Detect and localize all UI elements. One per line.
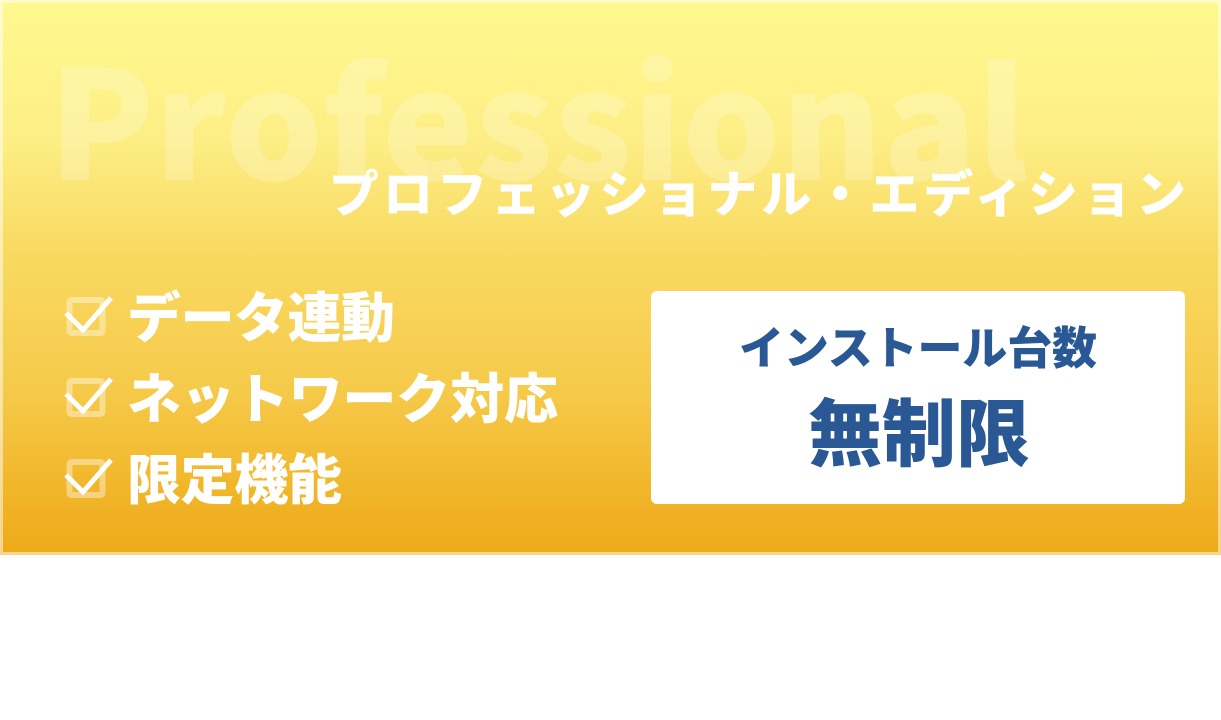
watermark: Professional: Professional (48, 6, 1028, 224)
feature: network support: ネットワーク対応 (127, 355, 558, 434)
heading: edition name: プロフェッショナル・エディション (329, 155, 1186, 227)
callout label: インストール台数 (739, 312, 1097, 377)
callout value: 無制限 (808, 375, 1030, 482)
feature: data link: データ連動 (127, 274, 395, 353)
panel: professional edition (0, 0, 1221, 555)
feature: limited functions: 限定機能 (127, 436, 342, 515)
callout: install count (651, 291, 1185, 504)
feature list (66, 274, 558, 515)
